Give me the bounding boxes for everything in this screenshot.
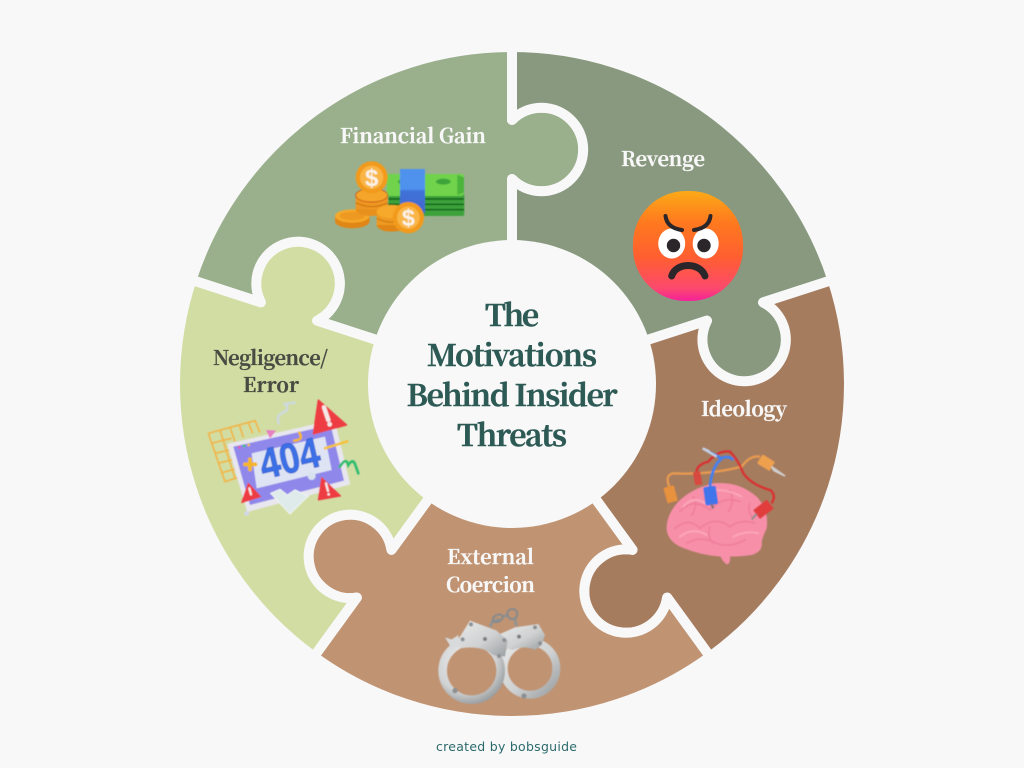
icon: 404 error screen <box>208 400 358 516</box>
label: External Coercion: External <box>447 541 534 570</box>
label: Financial Gain: Financial Gain <box>340 120 486 149</box>
icon: 404 error screen: 404 <box>255 429 325 489</box>
icon: cash and coins: $ <box>402 205 415 231</box>
panel: Revenge <box>512 47 832 384</box>
title: The <box>485 291 539 335</box>
panel: Financial Gain <box>192 47 583 384</box>
icon: angry face <box>633 191 743 301</box>
panel: Negligence/Error <box>175 242 512 657</box>
center circle with title <box>368 240 656 528</box>
title: Threats <box>457 411 567 455</box>
icon: cash and coins <box>335 161 464 233</box>
footer credit: created by bobsguide <box>436 739 577 754</box>
panel: Ideology <box>512 280 849 657</box>
icon: brain with electrodes <box>663 448 785 564</box>
label: External Coercion: Coercion <box>446 569 535 598</box>
label: Revenge: Revenge <box>621 143 705 172</box>
label: Negligence/Error: Negligence/ <box>213 342 328 371</box>
icon: handcuffs <box>443 609 556 700</box>
icon: cash and coins: $ <box>365 165 378 192</box>
label: External Coercion <box>446 541 535 598</box>
label: Negligence/Error: Error <box>243 369 299 398</box>
title: Behind Insider <box>406 371 618 415</box>
label: Negligence/Error <box>213 342 328 398</box>
panel: External Coercion <box>309 384 710 721</box>
title: Motivations <box>427 331 597 375</box>
label: Ideology: Ideology <box>701 393 787 422</box>
title <box>406 291 618 455</box>
